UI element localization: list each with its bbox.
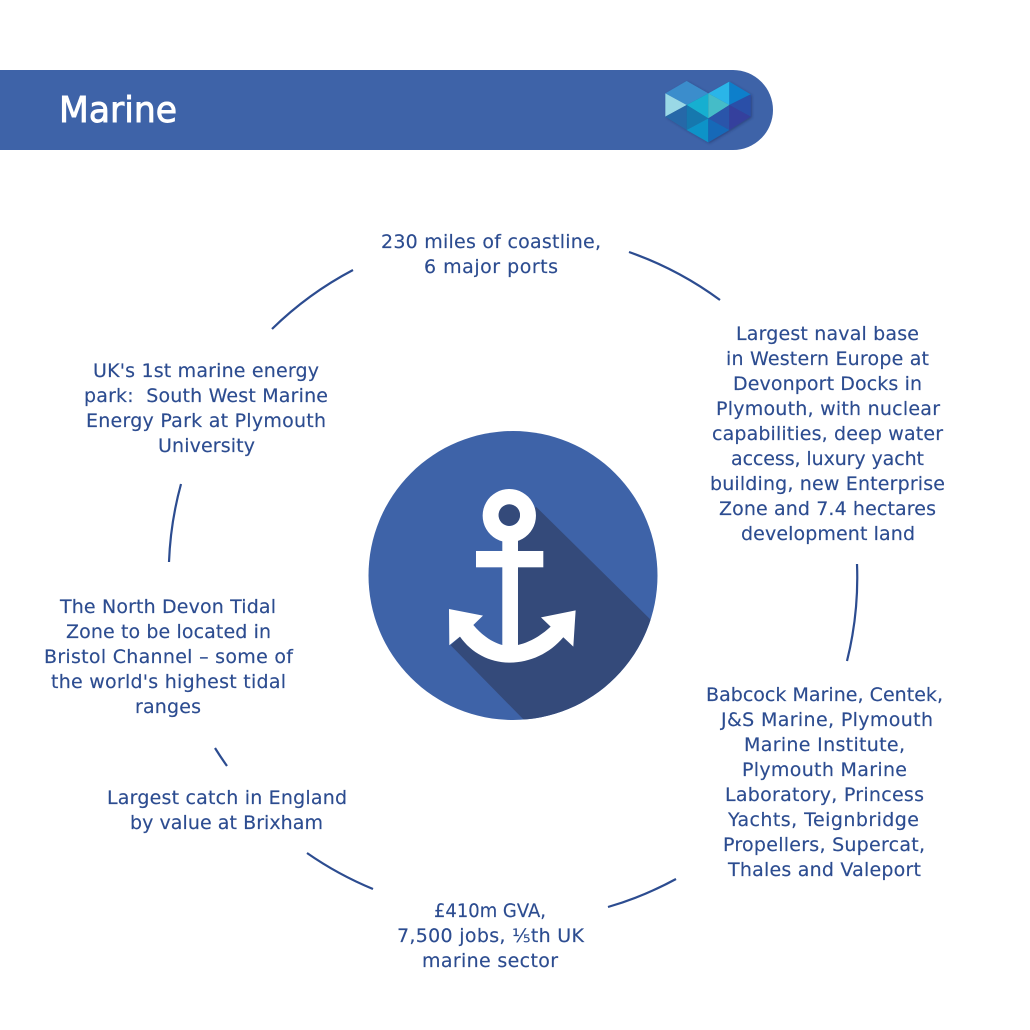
text: Brixham catch: Largest catch in England xyxy=(107,787,347,809)
text: marine companies: Babcock Marine, Centek, xyxy=(706,684,943,706)
text: GVA and jobs: 7,500 jobs, ⅕th UK xyxy=(397,925,585,947)
text: naval base: in Western Europe at xyxy=(726,348,929,370)
text: North Devon Tidal Zone xyxy=(44,596,294,718)
text: marine companies: Plymouth Marine xyxy=(742,759,907,781)
text: naval base: development land xyxy=(741,523,915,545)
text: naval base: access, luxury yacht xyxy=(731,448,924,470)
text: naval base: Largest naval base xyxy=(736,323,919,345)
title: Marine xyxy=(59,90,177,131)
text: marine energy park xyxy=(84,360,328,457)
text: naval base: Devonport Docks in xyxy=(733,373,922,395)
text: naval base: capabilities, deep water xyxy=(712,423,943,445)
text: Brixham catch xyxy=(107,787,347,834)
text: coastline: 6 major ports xyxy=(424,256,558,278)
icon: anchor in circle xyxy=(368,431,658,722)
text: naval base xyxy=(710,323,945,545)
text: GVA and jobs: marine sector xyxy=(422,950,558,972)
text: marine companies: Thales and Valeport xyxy=(727,859,921,881)
text: marine companies: Yachts, Teignbridge xyxy=(727,809,919,831)
text: marine companies: J&S Marine, Plymouth xyxy=(720,709,933,731)
text: North Devon Tidal Zone: the world's highest tidal xyxy=(51,671,286,693)
text: coastline: 230 miles of coastline, xyxy=(381,231,601,253)
text: GVA and jobs xyxy=(397,900,585,972)
text: marine energy park: park: South West Marine xyxy=(84,385,328,407)
text: marine energy park: University xyxy=(158,435,255,457)
ring of arc segments xyxy=(169,252,857,907)
text: marine companies xyxy=(706,684,943,881)
text: marine companies: Laboratory, Princess xyxy=(725,784,924,806)
text: North Devon Tidal Zone: The North Devon Tidal xyxy=(59,596,276,618)
text: marine energy park: Energy Park at Plymouth xyxy=(86,410,326,432)
text: marine companies: Propellers, Supercat, xyxy=(723,834,925,856)
header banner xyxy=(0,70,773,150)
infographic canvas xyxy=(0,70,944,968)
text: North Devon Tidal Zone: Zone to be located in xyxy=(66,621,271,643)
text: naval base: Plymouth, with nuclear xyxy=(716,398,940,420)
text: coastline xyxy=(381,231,601,278)
text: Brixham catch: by value at Brixham xyxy=(130,812,323,834)
text: GVA and jobs: £410m GVA, xyxy=(434,900,546,922)
text: marine energy park: UK's 1st marine energy xyxy=(93,360,319,382)
text: North Devon Tidal Zone: Bristol Channel – some of xyxy=(44,646,294,668)
text: marine companies: Marine Institute, xyxy=(744,734,905,756)
text: North Devon Tidal Zone: ranges xyxy=(135,696,201,718)
icon: geometric heart logo xyxy=(665,81,751,142)
text: naval base: building, new Enterprise xyxy=(710,473,945,495)
text: naval base: Zone and 7.4 hectares xyxy=(719,498,936,520)
